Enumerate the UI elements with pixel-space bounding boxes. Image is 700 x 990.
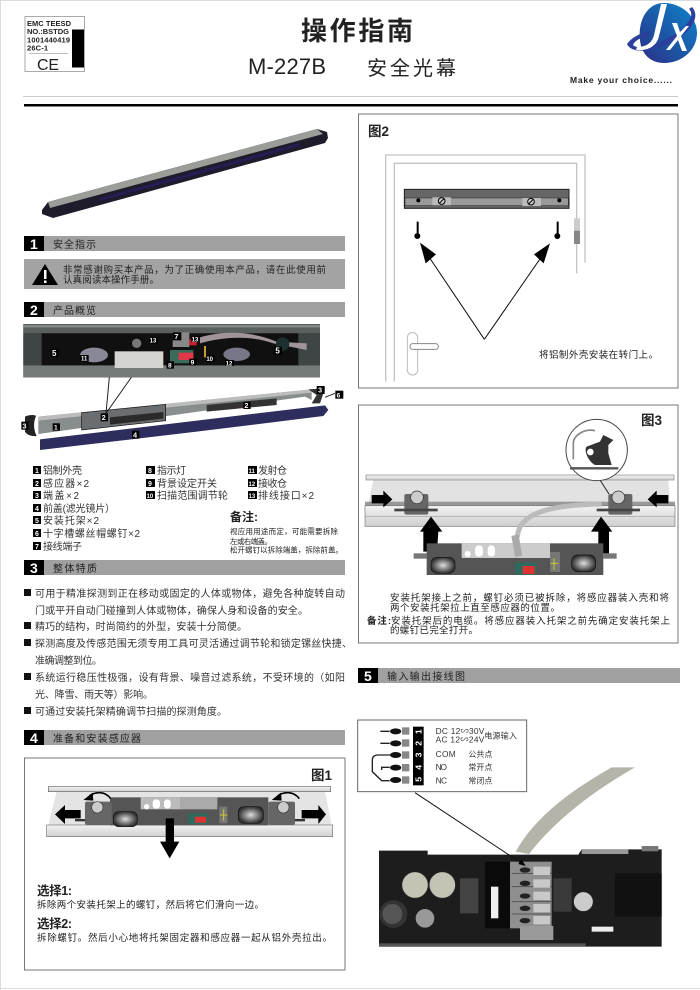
section 2 heading: 产品概览 <box>53 304 96 317</box>
enlarged photo: 5 <box>52 349 57 358</box>
features list: 光、降雪、雨天等）影响。 <box>35 688 153 701</box>
enlarged photo: 10 <box>206 357 214 363</box>
subtitle: 安全光幕 <box>367 57 456 80</box>
parts legend column 3: 13 <box>248 494 256 500</box>
safety warning box: 认真阅读本操作手册。 <box>63 274 159 286</box>
terminal diagram box: COM <box>436 749 456 759</box>
arrow: up left <box>420 517 442 552</box>
arrow: slide right <box>302 805 326 824</box>
features list <box>24 587 352 718</box>
section 1 heading: 1 <box>30 236 38 252</box>
wiring section <box>358 720 662 947</box>
title: 操作指南 <box>301 16 413 46</box>
note: 备注: <box>230 509 258 524</box>
terminal diagram box: 3 <box>413 752 423 757</box>
callout number: 2 <box>102 413 106 422</box>
arrow: slide left <box>55 805 81 824</box>
parts legend column 1: 铝制外壳 <box>43 464 82 477</box>
terminal diagram box <box>358 720 527 792</box>
features list: 准确调整到位。 <box>35 654 102 667</box>
parts legend column 1: 十字槽螺丝帽螺钉×2 <box>43 527 140 540</box>
enlarged photo: 13 <box>192 337 199 343</box>
parts legend column 2: 指示灯 <box>157 464 186 477</box>
panel: figure 2 <box>358 114 678 388</box>
end cap label right <box>317 386 343 399</box>
sensor housing <box>404 189 569 208</box>
parts legend column 3: 排线接口×2 <box>258 489 314 502</box>
arrow: pull down <box>160 818 179 858</box>
note: 左或右端盖。 <box>230 536 272 546</box>
parts legend column 3: 11 <box>248 469 256 475</box>
figure 2 caption: 将铝制外壳安装在转门上。 <box>539 349 658 361</box>
section 3 heading: 3 <box>30 560 38 576</box>
features list: 系统运行稳压性极强，设有背景、噪音过滤系统，不受环境的（如阳 <box>35 671 345 684</box>
parts legend column 1: 2 <box>35 481 39 488</box>
certification label <box>25 16 84 74</box>
option 1: 选择1: <box>37 884 72 898</box>
parts legend column 1: 端盖×2 <box>43 489 79 502</box>
callout number <box>101 413 108 422</box>
figure 3 instructions: 两个安装托架拉上直至感应器的位置。 <box>390 602 560 614</box>
aluminium housing <box>38 388 325 434</box>
arrow: rotate left <box>83 793 111 801</box>
enlarged photo <box>23 324 320 377</box>
section 3 heading: 整体特质 <box>53 562 97 575</box>
parts legend column 1 <box>33 464 140 553</box>
arrow: rotate right <box>272 793 299 801</box>
parts legend column 1: 7 <box>35 544 39 551</box>
parts legend column 3 <box>248 464 314 502</box>
callout lines <box>106 377 131 413</box>
section 4 heading <box>24 730 345 746</box>
section 1 heading <box>24 236 345 252</box>
safety warning box <box>24 259 345 289</box>
terminal diagram box: 4 <box>413 765 423 770</box>
front cover <box>40 405 328 450</box>
parts legend column 1: 5 <box>35 518 39 525</box>
enlarged photo: 11 <box>81 357 88 363</box>
terminal diagram box: 5 <box>413 777 423 782</box>
end cap label right: 6 <box>337 392 341 399</box>
end cap left <box>21 415 37 436</box>
features list: 可用于精准探测到正在移动或固定的人体或物体，避免各种旋转自动 <box>35 587 345 600</box>
option 2: 选择2: <box>37 917 72 931</box>
features list: 可通过安装托架精确调节扫描的探测角度。 <box>35 705 227 718</box>
figure 1 diagram <box>47 787 333 858</box>
enlarged photo: 13 <box>150 339 157 345</box>
arrow: push left <box>648 491 668 507</box>
door diagram <box>386 155 585 382</box>
icon: screw right <box>554 222 560 239</box>
sensor cable <box>517 504 602 537</box>
section 2 heading <box>24 302 345 318</box>
parts legend column 1: 安装托架×2 <box>43 514 99 527</box>
option 2 <box>37 917 332 944</box>
note <box>230 509 343 554</box>
terminal diagram box: 常闭点 <box>468 776 492 785</box>
certification label: 1001440419 <box>27 36 70 44</box>
arrow: to right screw <box>484 243 550 339</box>
option 1 <box>37 884 264 911</box>
certification label: EMC TEESD <box>27 19 72 28</box>
mounting brackets <box>394 491 640 515</box>
terminal diagram box: 2 <box>413 741 423 746</box>
option 2: 拆除螺钉。然后小心地将托架固定器和感应器一起从铝外壳拉出。 <box>37 932 332 944</box>
section 2 heading: 2 <box>30 302 38 318</box>
aluminium housing: 2 <box>244 401 248 410</box>
parts legend column 2: 8 <box>148 468 152 475</box>
figure 3 instructions: 安装托架接上之前，螺钉必须已被拆除，将感应器装入壳和将 <box>390 592 669 604</box>
parts legend column 2: 背景设定开关 <box>157 477 217 490</box>
note: 松开螺钉以拆除端盖，拆除前盖。 <box>230 544 343 554</box>
parts legend column 1: 接线端子 <box>43 540 82 553</box>
tagline: Make your choice...... <box>570 75 672 85</box>
pointer line <box>415 793 526 866</box>
terminal diagram box: DC 12∽30V <box>436 726 485 736</box>
terminal diagram box: 常开点 <box>468 763 492 772</box>
figure 3 diagram <box>365 419 675 575</box>
safety warning box: 非常感谢购买本产品，为了正确使用本产品，请在此使用前 <box>63 264 326 276</box>
enlarged photo: 7 <box>174 332 178 341</box>
certification label: CE <box>37 57 59 74</box>
section 4 heading: 4 <box>30 730 38 746</box>
parts legend column 2: 扫描范围调节轮 <box>157 489 228 502</box>
terminal diagram box: 公共点 <box>468 750 492 759</box>
parts legend column 2: 10 <box>146 494 154 500</box>
model number: M-227B <box>248 54 326 79</box>
cable <box>516 767 635 854</box>
end cap left: 3 <box>22 421 26 430</box>
terminal diagram box: 1 <box>413 729 423 734</box>
end cap label right: 3 <box>318 386 322 395</box>
terminal diagram box: AC 12∽24V <box>436 735 485 745</box>
parts legend column 1: 6 <box>35 531 39 538</box>
logo <box>627 3 697 63</box>
figure 3 instructions: 备注: <box>367 615 391 627</box>
terminal diagram box: NC <box>436 775 447 785</box>
arrow: to left screw <box>420 243 484 339</box>
product overview diagram <box>21 324 343 450</box>
panel: figure 1 <box>24 758 345 970</box>
parts legend column 3: 接收仓 <box>258 477 287 490</box>
parts legend column 3: 12 <box>248 482 256 488</box>
figure 3 instructions: 安装托架后的电缆。将感应器装入托架之前先确定安装托架上 <box>391 615 670 627</box>
parts legend column 2: 9 <box>148 481 152 488</box>
terminal diagram box: 电源输入 <box>484 731 517 741</box>
parts legend column 1: 1 <box>35 468 39 475</box>
panel: figure 3 <box>358 405 678 643</box>
features list: 精巧的结构，时尚简约的外型，安装十分简便。 <box>35 620 247 633</box>
option 1: 拆除两个安装托架上的螺钉，然后将它们滑向一边。 <box>37 899 264 911</box>
front cover: 4 <box>133 430 138 439</box>
parts legend column 1: 感应器×2 <box>43 477 89 490</box>
section 5 heading <box>358 668 680 684</box>
sensor module <box>414 535 617 575</box>
zoom callout circle <box>566 419 627 494</box>
figure 3 instructions: 的螺钉已完全打开。 <box>390 624 478 636</box>
enlarged photo: 9 <box>191 360 195 367</box>
section 5 heading: 5 <box>364 668 372 684</box>
icon: warning triangle <box>32 264 58 285</box>
figure 1 label: 图1 <box>311 768 332 783</box>
enlarged photo: 5 <box>275 347 280 356</box>
enlarged photo: 8 <box>168 363 172 370</box>
terminal diagram box: NO <box>436 762 448 772</box>
aluminium housing: 1 <box>54 425 58 432</box>
section 5 heading: 输入输出接线图 <box>387 670 465 683</box>
certification label: NO.:BSTDG <box>27 27 69 36</box>
parts legend column 1: 4 <box>35 506 39 513</box>
icon: screw left <box>414 222 420 239</box>
certification label: 26C-1 <box>27 44 48 52</box>
parts legend column 3: 发射仓 <box>258 464 287 477</box>
enlarged photo: 12 <box>226 361 233 367</box>
figure 2 label: 图2 <box>368 124 389 139</box>
figure 3 instructions <box>367 592 670 636</box>
section 3 heading <box>24 560 345 576</box>
figure 3 label: 图3 <box>641 413 662 428</box>
parts legend column 1: 3 <box>35 493 39 500</box>
note: 视应用用途而定，可能需要拆除 <box>230 526 338 536</box>
features list: 门或平开自动门碰撞到人体或物体，确保人身和设备的安全。 <box>35 604 308 617</box>
arrow: push right <box>372 491 392 507</box>
parts legend column 1: 前盖(滤光镜片） <box>43 502 115 515</box>
parts legend column 2 <box>146 464 228 502</box>
product photo: light curtain bar <box>42 129 328 218</box>
arrow: up right <box>591 517 612 553</box>
features list: 探测高度及传感范围无须专用工具可灵活通过调节轮和锁定镙丝快捷、 <box>35 637 352 650</box>
PCB photo <box>379 846 662 947</box>
section 1 heading: 安全指示 <box>53 238 96 251</box>
section 4 heading: 准备和安装感应器 <box>53 732 141 745</box>
